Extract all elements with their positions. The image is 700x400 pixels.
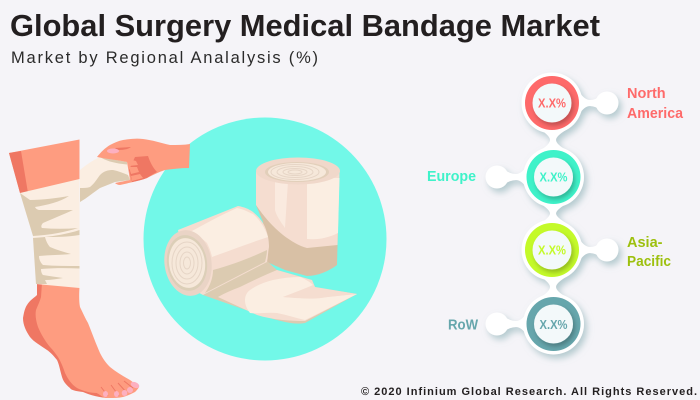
node: RoW: X.X%: [540, 318, 568, 332]
label: North America: North: [627, 86, 666, 102]
teal background circle: [144, 118, 386, 360]
upper leg skin: [9, 140, 80, 193]
copyright footer: © 2020 Infinium Global Research. All Rights Reserved.: [361, 386, 697, 398]
label: Asia-Pacific: Pacific: [627, 254, 671, 270]
leg bandage wrap: [20, 179, 80, 288]
node: Asia-Pacific: X.X%: [538, 244, 566, 258]
hand: [97, 139, 190, 185]
subtitle: Market by Regional Analalysis (%): [11, 49, 318, 67]
illustration: bandaged leg: [9, 139, 190, 398]
label: RoW: RoW: [448, 318, 478, 334]
node: North America: X.X%: [538, 96, 566, 110]
strip of bandage held by hand: [80, 157, 130, 202]
regional timeline: [486, 72, 618, 354]
label: Europe: Europe: [427, 169, 476, 185]
illustration: bandage rolls: [160, 158, 357, 324]
lower leg and foot: [23, 283, 140, 398]
title: Global Surgery Medical Bandage Market: [10, 8, 600, 43]
fallen bandage roll: [160, 206, 269, 299]
node: RoW: [526, 297, 580, 351]
white connected base with shadow: [486, 72, 618, 354]
label: North America: America: [627, 106, 684, 122]
label: Asia-Pacific: Asia-: [627, 235, 663, 251]
unrolled bandage strip: [203, 261, 357, 324]
node: Asia-Pacific: [525, 223, 579, 277]
upright bandage roll: [256, 158, 340, 276]
node: Europe: X.X%: [540, 170, 568, 184]
node: Europe: [526, 150, 580, 204]
node: North America: [525, 76, 579, 130]
